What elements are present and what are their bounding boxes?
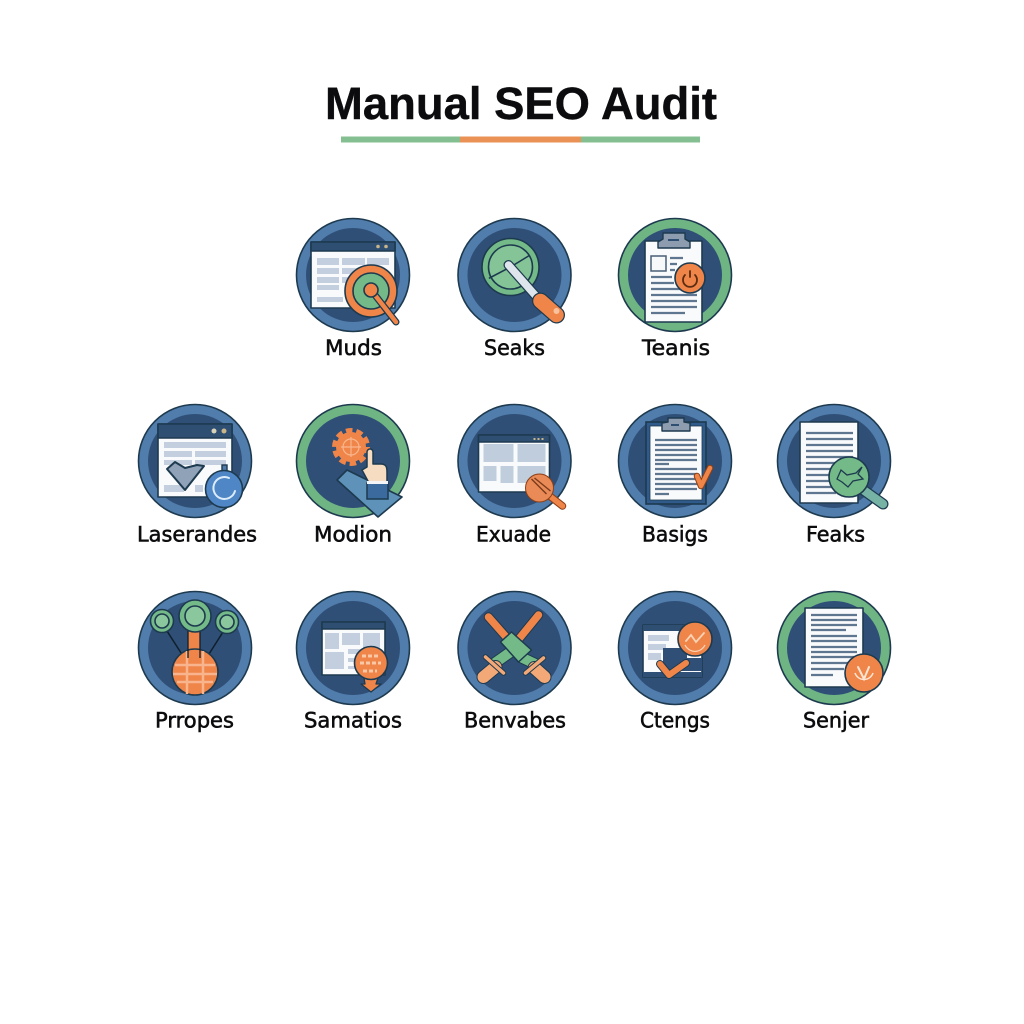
icon: crossed tools [458,592,571,704]
icon: browser window with orange pin [296,592,410,704]
label: Senjer: Senjer [803,708,869,732]
panel: Teanis [618,218,732,360]
panel: Muds [296,218,410,360]
label: Benvabes: Benvabes [464,708,566,732]
panel: Exuade [458,404,571,546]
panel: Propes [138,592,252,732]
icon: clipboard with power badge [618,218,732,332]
panel: Feaks [778,404,890,546]
icon: clipboard with check [618,404,732,518]
icon: browser window with orange target [296,218,410,332]
label: Propes: Prropes [155,708,234,732]
label: Muds: Muds [325,336,382,360]
icon: browser layout with orange tool [458,404,571,518]
panel: Samatios [296,592,410,732]
label: Basigs: Basigs [642,522,708,546]
label: Teanis: Teanis [641,336,710,360]
icon: browser window with check and blue badge [138,404,252,518]
label: Exuade: Exuade [476,522,551,546]
icon: green dial with screwdriver [458,218,571,332]
label: Modion: Modion [314,522,392,546]
icon: window with trend badge and check [618,592,732,704]
title: Manual SEO Audit [325,78,717,129]
panel: Modion [296,404,410,546]
icon: network nodes over orange globe [138,592,252,704]
panel: Seaks [458,218,571,360]
label: Samatios: Samatios [304,708,402,732]
panel: Senjer [778,592,890,732]
panel: Benvabes [458,592,571,732]
panel: Ctengs [618,592,732,732]
panel: Laserandes [137,404,257,546]
icon: document with green magnifier [778,404,890,518]
label: Seaks: Seaks [484,336,545,360]
label: Ctengs: Ctengs [640,708,710,732]
icon: gear with pointing hand [296,404,410,518]
label: Laserandes: Laserandes [137,522,257,546]
icon: document with orange check badge [778,592,890,704]
panel: Basigs [618,404,732,546]
label: Feaks: Feaks [806,522,865,546]
